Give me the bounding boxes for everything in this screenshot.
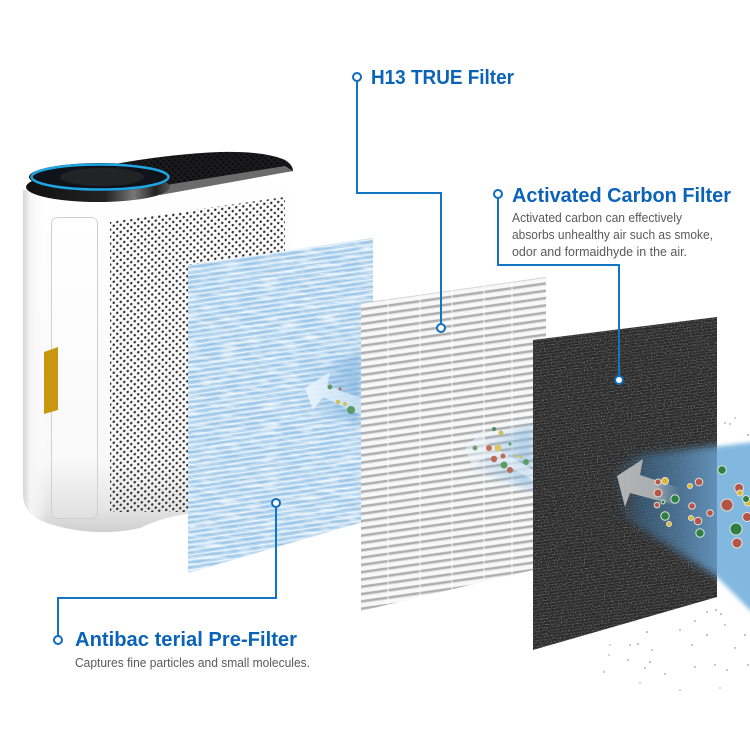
side door panel bbox=[52, 218, 98, 518]
callout: Activated Carbon Filter bbox=[494, 185, 731, 384]
grey airflow arrow bbox=[617, 459, 680, 507]
blue air beam on carbon bbox=[614, 440, 717, 584]
leader line bbox=[58, 507, 276, 636]
description: Captures fine particles and small molecules. bbox=[75, 656, 310, 670]
heading: Activated Carbon Filter bbox=[512, 185, 731, 207]
control ring bbox=[26, 163, 171, 202]
purifier body bbox=[23, 172, 293, 532]
panel: H13 filter bbox=[361, 270, 546, 620]
description: odor and formaidhyde in the air. bbox=[512, 245, 687, 259]
top vent bbox=[115, 152, 293, 192]
panel: pre-filter bbox=[188, 238, 373, 573]
description: absorbs unhealthy air such as smoke, bbox=[512, 228, 713, 242]
description bbox=[512, 211, 713, 259]
yellow pull tab bbox=[44, 347, 58, 414]
particles: germs and dust bbox=[654, 466, 750, 548]
leader line bbox=[357, 81, 441, 323]
leader line bbox=[498, 198, 619, 376]
description: Activated carbon can effectively bbox=[512, 211, 683, 225]
heading: H13 TRUE Filter bbox=[371, 67, 514, 89]
dust speckles bbox=[603, 417, 749, 691]
blue air beam outside the filter bbox=[717, 440, 750, 614]
heading: Antibac terial Pre-Filter bbox=[75, 629, 297, 651]
perforated grille bbox=[110, 197, 285, 512]
H13 air arrow bbox=[465, 425, 533, 490]
callout: H13 TRUE Filter bbox=[353, 67, 514, 332]
callout: Antibacterial Pre-Filter bbox=[54, 499, 310, 670]
air purifier unit bbox=[23, 152, 293, 533]
pre-filter air arrow bbox=[300, 352, 361, 425]
panel: activated carbon filter bbox=[533, 317, 730, 650]
